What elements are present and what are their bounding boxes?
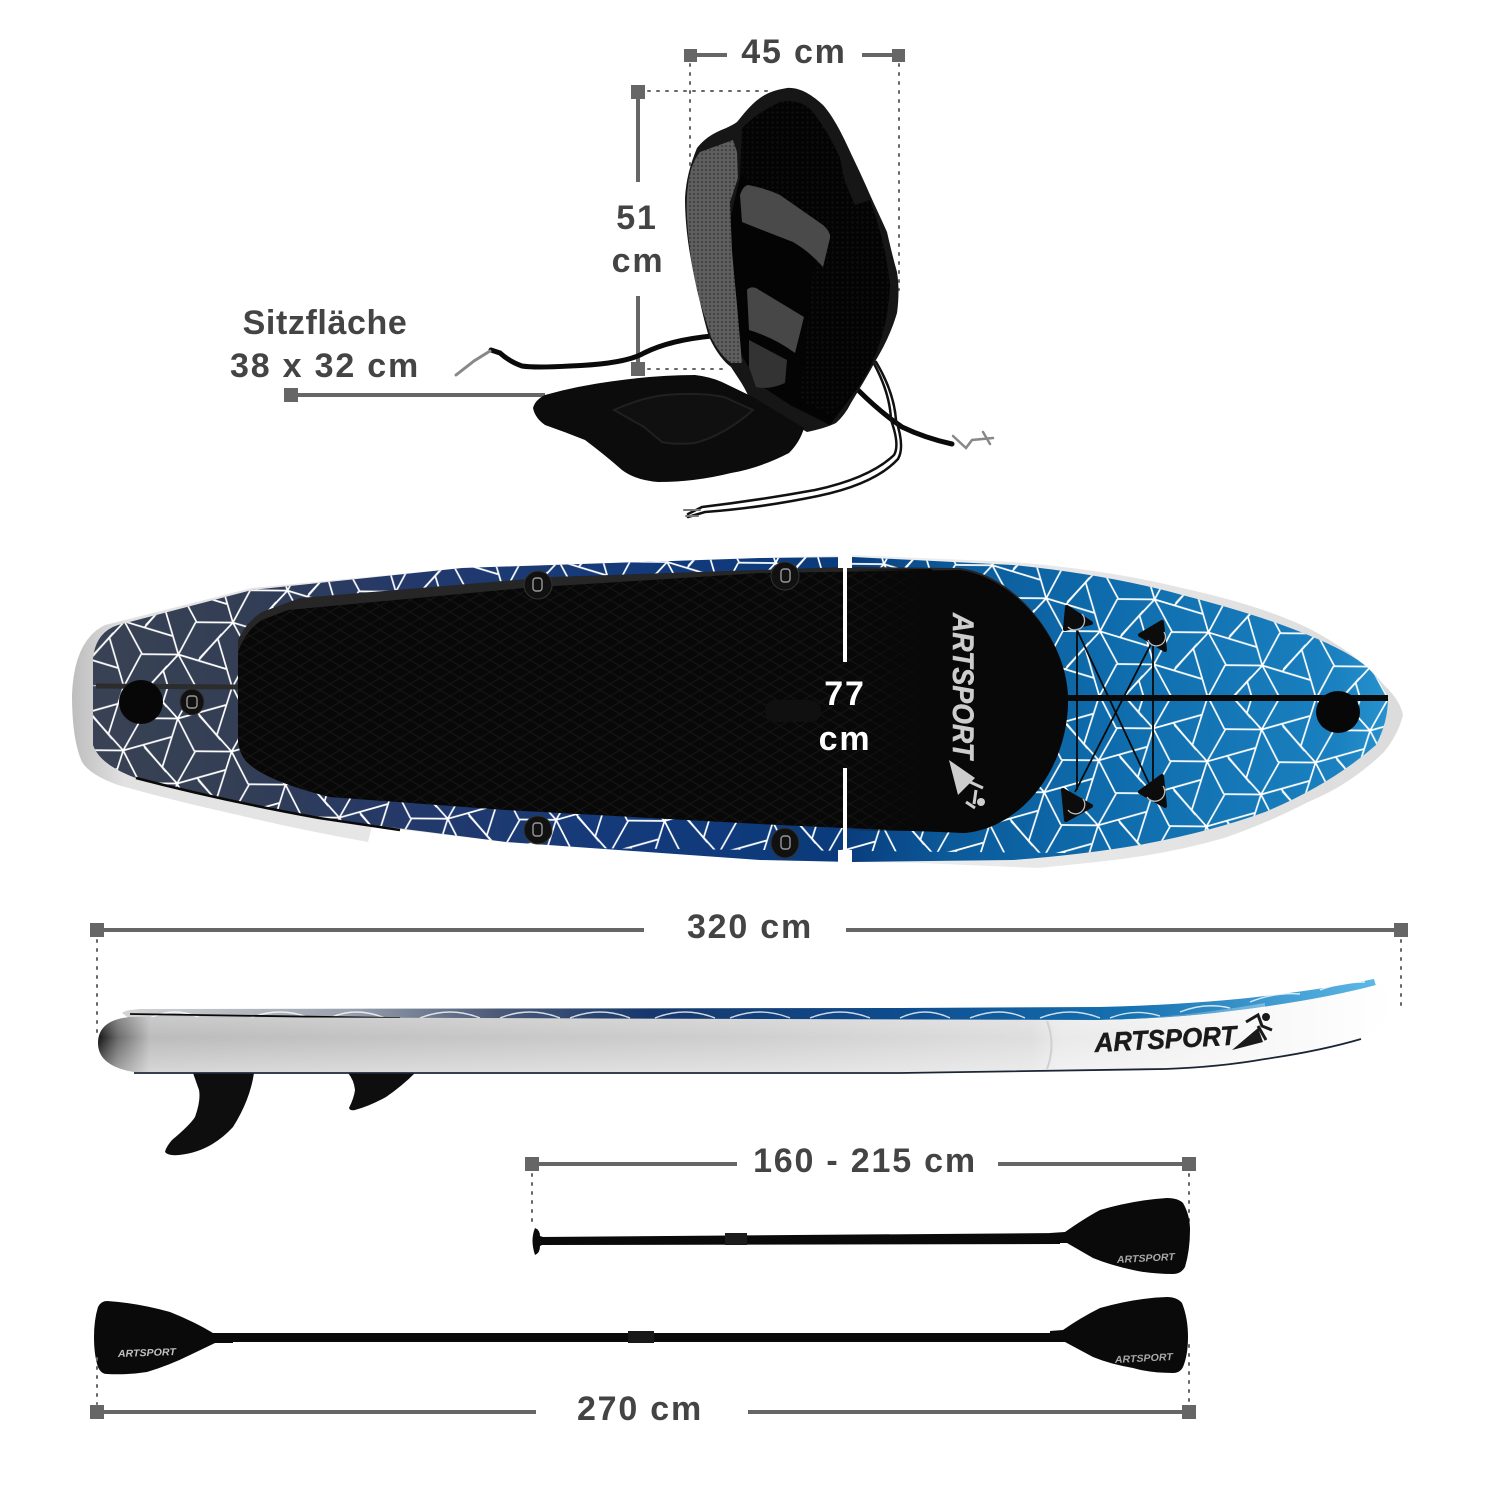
deck strip side — [122, 979, 1376, 1020]
nose deck strip — [1066, 695, 1388, 701]
seat: dimension seating area: 38 x 32 cm — [230, 347, 420, 385]
seat: dimension 45 cm: 45 cm — [741, 33, 847, 71]
seat: dimension 51 cm: 51 — [616, 199, 658, 237]
top view board — [72, 555, 1403, 868]
long paddle — [94, 1297, 1188, 1374]
deck lower black edge — [136, 778, 400, 830]
anchor rings — [1068, 614, 1165, 814]
middle fin — [348, 1073, 415, 1110]
nose valve — [1316, 691, 1360, 733]
seat back mesh — [740, 101, 890, 415]
seat: dimension seating area — [230, 304, 545, 402]
seat: dimension 51 cm: cm — [612, 242, 664, 280]
D-rings — [180, 562, 799, 858]
traction mat diamond texture — [238, 570, 930, 830]
blade logo: ARTSPORT — [1116, 1252, 1176, 1266]
tail fin box circle — [119, 680, 163, 724]
seat back inner black — [730, 101, 890, 425]
padding stripe lower — [749, 340, 787, 388]
seat straps — [456, 336, 993, 517]
side logo — [1093, 1013, 1272, 1058]
left blade logo: ARTSPORT — [117, 1347, 177, 1360]
inflatable body — [98, 985, 1394, 1072]
left blade — [94, 1301, 233, 1374]
seat back grey side panel — [687, 140, 742, 363]
side view board — [98, 979, 1394, 1155]
tail deck strip — [96, 686, 238, 687]
central carry handle — [765, 700, 821, 722]
seat: dimension 45 cm — [684, 33, 905, 290]
mat texture fade — [850, 569, 932, 831]
handle — [532, 1228, 546, 1255]
bungee anchors — [1063, 607, 1165, 820]
board rim — [72, 555, 1403, 868]
seat: dimension seating area: Sitzfläche — [243, 304, 407, 342]
dimension 270 cm: 270 cm — [577, 1390, 703, 1428]
dimension 77 cm — [819, 555, 871, 864]
body seam — [1047, 1021, 1052, 1069]
seat pad — [533, 375, 804, 482]
right blade logo: ARTSPORT — [1114, 1352, 1174, 1366]
seat back shell — [685, 88, 898, 432]
dimension 160 - 215 cm: 160 - 215 cm — [753, 1142, 977, 1180]
seat: dimension 51 cm — [612, 85, 770, 376]
deck strip arcs — [150, 982, 1365, 1018]
dimension 320 cm — [90, 908, 1408, 1032]
blade — [1050, 1198, 1190, 1274]
dimension 77 cm: 77 — [824, 675, 866, 713]
right blade — [1050, 1297, 1188, 1373]
dimension 77 cm: cm — [819, 720, 871, 758]
padding stripe upper — [740, 185, 830, 267]
strip black underline at tail — [130, 1014, 400, 1018]
side logo: ARTSPORT — [1093, 1020, 1240, 1058]
bottom edge — [134, 1039, 1361, 1073]
rear fin — [165, 1073, 254, 1155]
traction mat band — [238, 567, 1068, 833]
board deck with geometric pattern — [93, 557, 1388, 862]
body highlight — [98, 1003, 1265, 1072]
shaft — [540, 1233, 1060, 1245]
dimension 160 - 215 cm — [525, 1142, 1196, 1232]
short paddle — [532, 1198, 1190, 1274]
bungee cord — [1075, 630, 1153, 792]
dimension 270 cm — [90, 1345, 1196, 1428]
kayak seat illustration — [456, 88, 993, 517]
padding stripe middle — [747, 287, 804, 353]
traction mat — [238, 570, 1068, 833]
deck logo: ARTSPORT — [946, 612, 979, 761]
shaft — [205, 1333, 1065, 1342]
seat pad inner indent — [614, 394, 753, 444]
dimension 320 cm: 320 cm — [687, 908, 813, 946]
